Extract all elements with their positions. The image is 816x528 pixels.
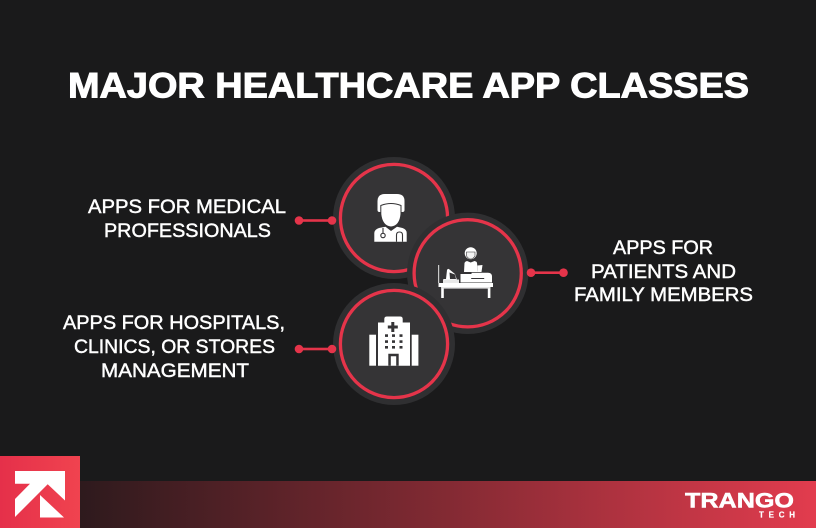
connector: medical professionals <box>295 216 336 225</box>
circle: patients and family members <box>407 213 528 334</box>
connector: hospitals <box>295 345 336 353</box>
label: apps for patients and family members: PATIENTS AND <box>591 261 736 283</box>
label: apps for hospitals, clinics, or stores management: CLINICS, OR STORES <box>74 336 275 358</box>
icon: hospital <box>369 316 418 366</box>
circle: medical professionals <box>333 157 455 279</box>
label: apps for patients and family members: APPS FOR <box>613 237 713 259</box>
connector: patients <box>527 268 568 277</box>
circle: hospitals, clinics, stores <box>333 283 455 405</box>
title: MAJOR HEALTHCARE APP CLASSES <box>68 66 749 106</box>
label: apps for hospitals, clinics, or stores management: APPS FOR HOSPITALS, <box>63 312 285 334</box>
label: apps for medical professionals: APPS FOR MEDICAL <box>88 196 286 218</box>
label: apps for patients and family members: FAMILY MEMBERS <box>574 284 753 306</box>
wordmark: Trango Tech <box>685 490 795 520</box>
icon: doctor <box>374 194 407 242</box>
logo square with arrow <box>0 456 80 528</box>
label: apps for patients and family members <box>574 237 753 306</box>
wordmark: Trango Tech: TECH <box>759 510 795 520</box>
label: apps for medical professionals <box>88 196 286 242</box>
label: apps for hospitals, clinics, or stores management: MANAGEMENT <box>101 360 249 382</box>
icon: doctor at desk <box>438 247 493 298</box>
footer gradient bar <box>80 481 816 528</box>
wordmark: Trango Tech: TRANGO <box>685 490 794 512</box>
label: apps for medical professionals: PROFESSIONALS <box>104 220 271 242</box>
label: apps for hospitals, clinics, or stores management <box>63 312 285 382</box>
